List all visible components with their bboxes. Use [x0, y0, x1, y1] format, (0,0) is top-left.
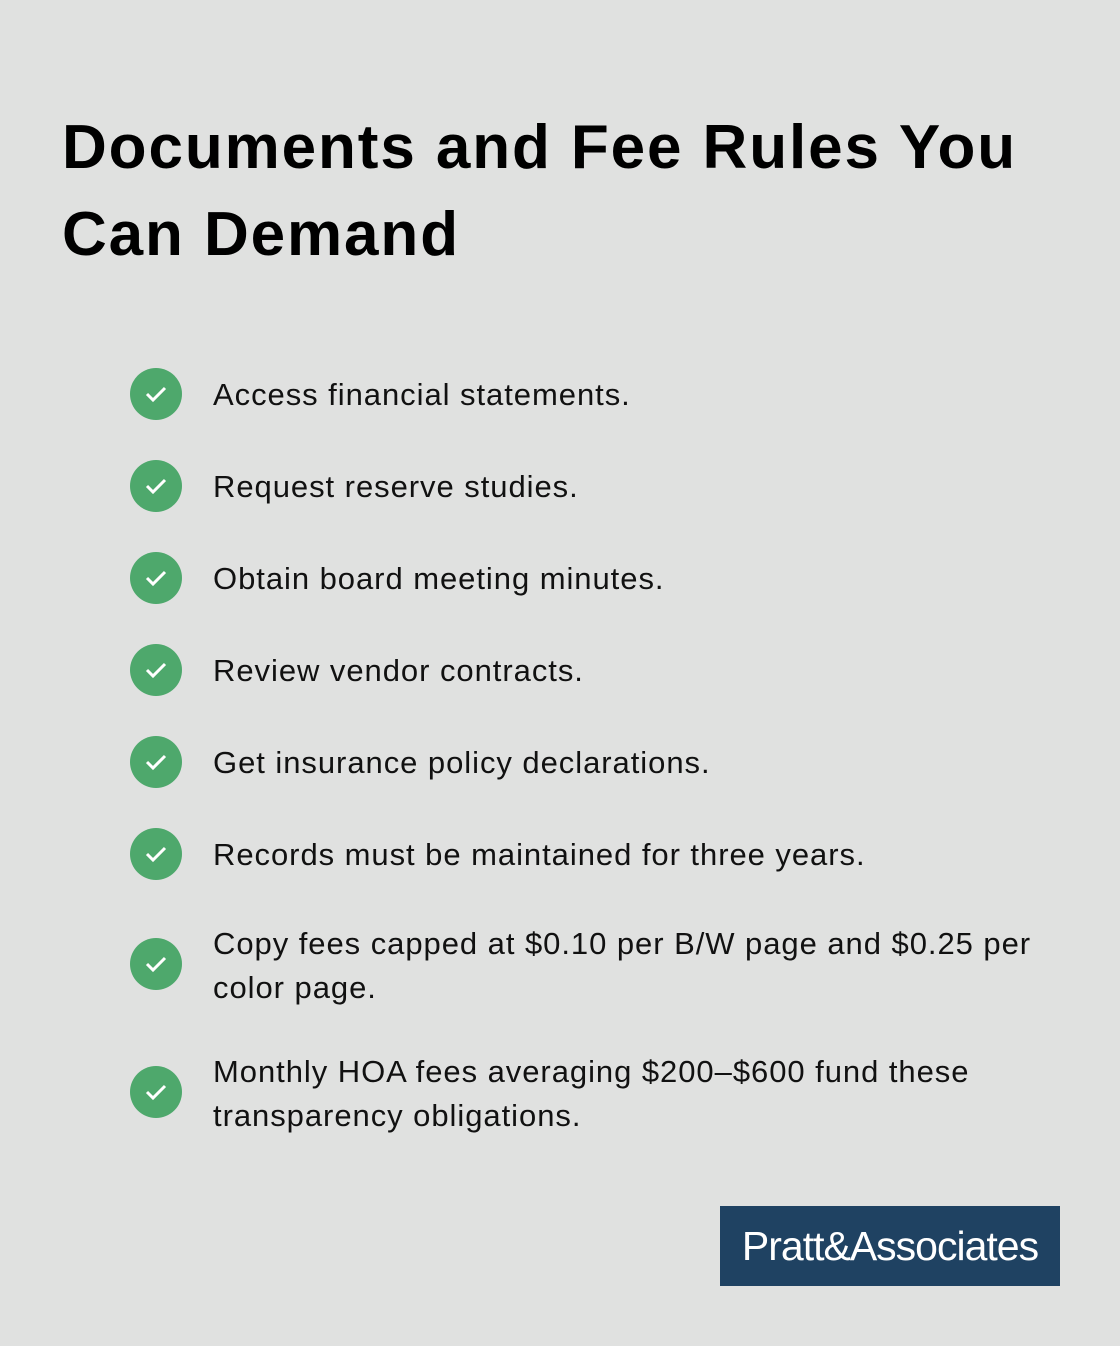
logo: Pratt&Associates — [742, 1223, 1038, 1269]
item 7: color page. — [213, 970, 377, 1005]
item 3: Obtain board meeting minutes. — [213, 561, 664, 596]
item 2 — [130, 460, 579, 512]
logo — [720, 1206, 1060, 1286]
item 6: Records must be maintained for three years. — [213, 837, 866, 872]
item 8 — [130, 1054, 969, 1133]
item 6 — [130, 828, 866, 880]
item 8: transparency obligations. — [213, 1098, 581, 1133]
title — [62, 113, 1017, 269]
title: Can Demand — [62, 200, 460, 269]
item 3 — [130, 552, 664, 604]
item 8: Monthly HOA fees averaging $200–$600 fund these — [213, 1054, 969, 1089]
item 7: Copy fees capped at $0.10 per B/W page and $0.25 per — [213, 926, 1031, 961]
item 5: Get insurance policy declarations. — [213, 745, 711, 780]
item 7 — [130, 926, 1031, 1005]
item 4 — [130, 644, 584, 696]
item 2: Request reserve studies. — [213, 469, 579, 504]
item 1 — [130, 368, 631, 420]
title: Documents and Fee Rules You — [62, 113, 1017, 182]
item 1: Access financial statements. — [213, 377, 631, 412]
item 4: Review vendor contracts. — [213, 653, 584, 688]
item 5 — [130, 736, 711, 788]
